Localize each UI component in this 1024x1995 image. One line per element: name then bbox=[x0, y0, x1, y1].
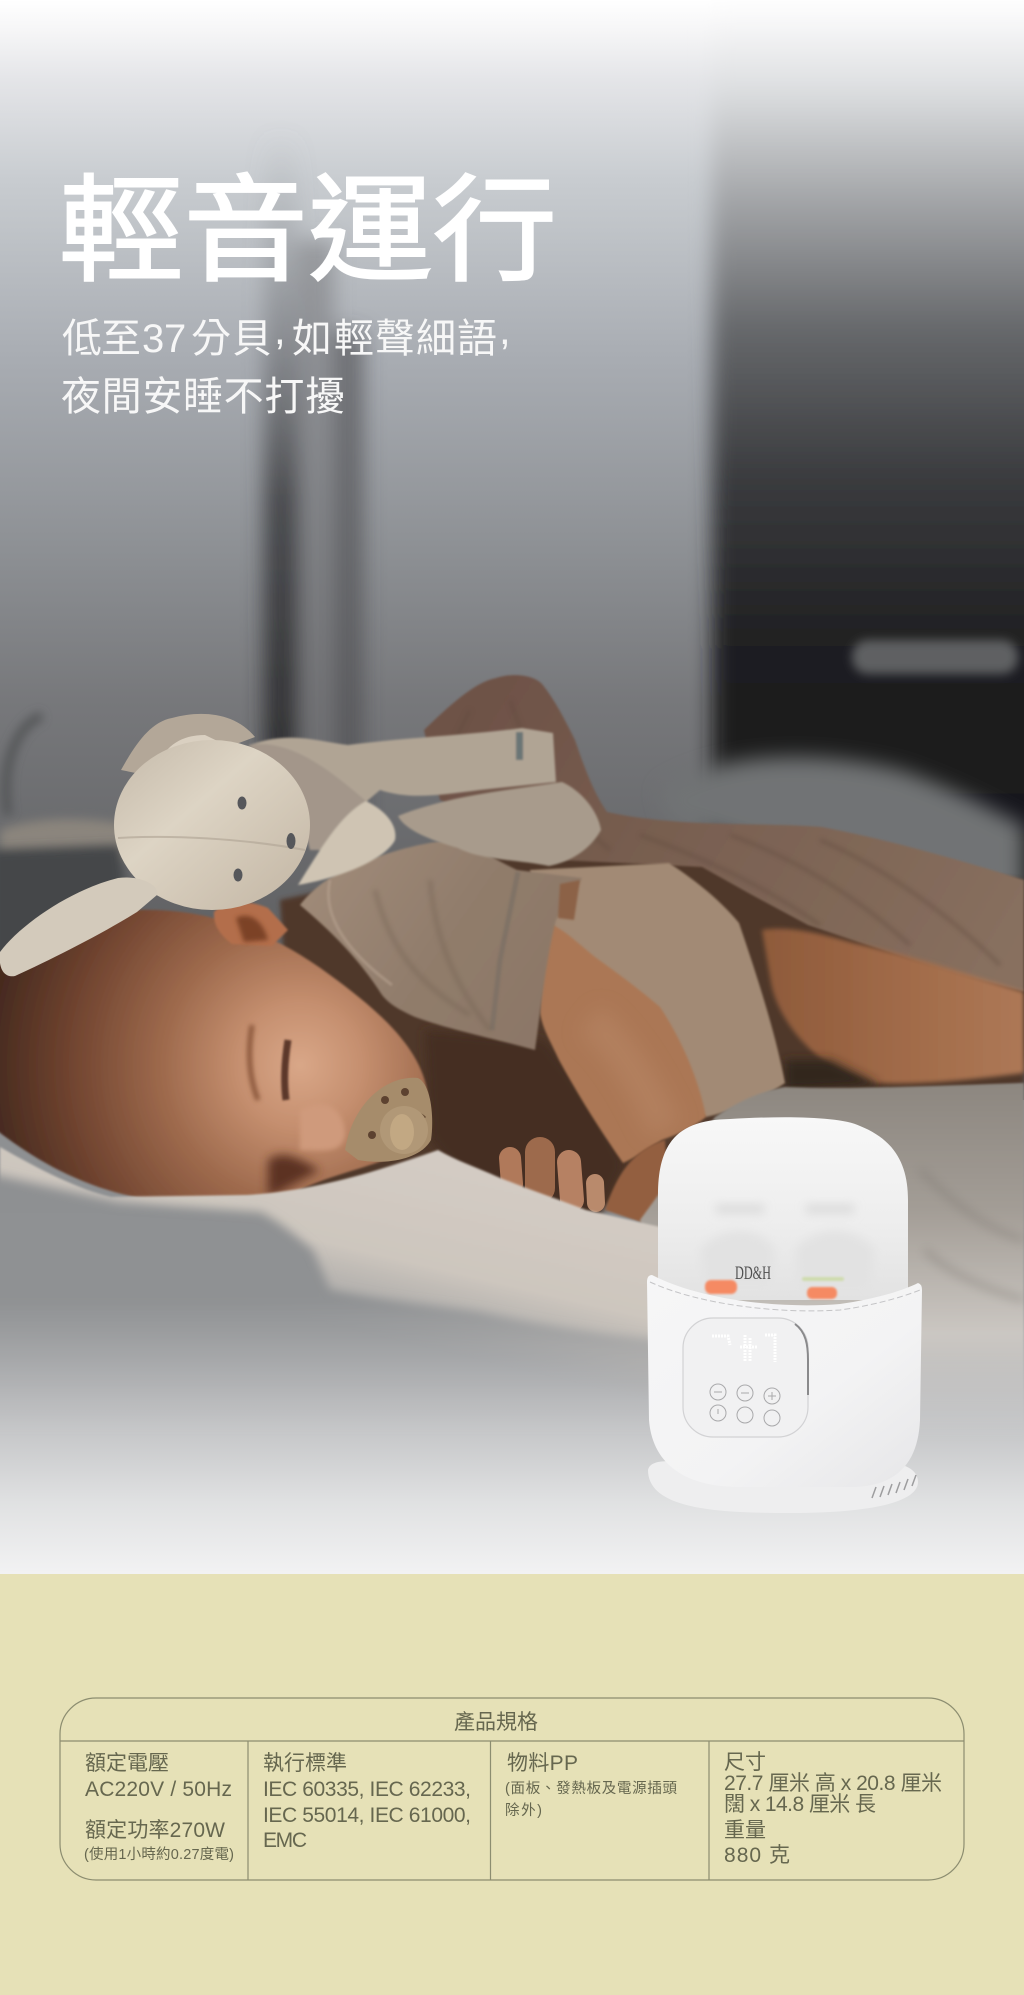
spec column: size and weight: 闊 x 14.8 厘米 長 bbox=[724, 1793, 876, 1816]
spec column: standards: EMC bbox=[263, 1829, 307, 1852]
spec column: standards: 執行標準 bbox=[263, 1752, 347, 1775]
teddy top ear bbox=[121, 714, 255, 778]
spec column: voltage and power: 額定功率270W bbox=[85, 1819, 225, 1842]
eyelid and lashes bbox=[250, 1025, 258, 1100]
title: 輕音運行 bbox=[59, 166, 557, 296]
soft gradient foreground bbox=[0, 1100, 1024, 1574]
shirt sleeve bbox=[300, 840, 582, 1050]
subtitle: 輕 bbox=[334, 317, 374, 361]
temperature display bbox=[712, 1335, 775, 1362]
spec column: standards bbox=[263, 1752, 471, 1852]
spec column: size and weight: 880 克 bbox=[724, 1844, 790, 1867]
spec column: size and weight bbox=[724, 1751, 942, 1867]
subtitle: 語 bbox=[457, 317, 497, 361]
subtitle: 貝 bbox=[232, 317, 272, 361]
pacifier bbox=[345, 1078, 432, 1162]
spec table bbox=[60, 1698, 964, 1880]
base plate bbox=[648, 1461, 918, 1513]
baby arm bbox=[540, 923, 706, 1163]
subtitle: 3 bbox=[142, 317, 164, 361]
baby head bbox=[0, 910, 428, 1200]
subtitle: 低 bbox=[62, 317, 102, 361]
spec column: material: 物料PP bbox=[507, 1752, 578, 1775]
baby ear bbox=[214, 902, 288, 946]
product: double bottle warmer bbox=[647, 1117, 922, 1513]
brand logo: DD&H bbox=[735, 1263, 771, 1284]
dark shadow under arm bbox=[425, 1030, 625, 1215]
baby torso shirt bbox=[530, 863, 785, 1117]
subtitle: 細 bbox=[416, 317, 456, 361]
spec column: size and weight: 尺寸 bbox=[724, 1751, 766, 1774]
nose bbox=[300, 1104, 345, 1151]
under body shadow fill bbox=[280, 830, 1024, 1220]
panel: specifications background bbox=[0, 1574, 1024, 1995]
spec column: standards: IEC 55014, IEC 61000, bbox=[263, 1804, 471, 1827]
spec column: voltage and power: AC220V / 50Hz bbox=[85, 1778, 232, 1801]
spec column: standards: IEC 60335, IEC 62233, bbox=[263, 1778, 471, 1801]
spec column: size and weight: 重量 bbox=[724, 1819, 766, 1842]
photo: sleeping baby scene bbox=[0, 0, 1024, 1574]
blurred light pill on dark wall bbox=[852, 640, 1018, 674]
bed sheet folds right bbox=[920, 1170, 1024, 1300]
subtitle: 至 bbox=[101, 317, 141, 361]
hand bbox=[510, 1140, 670, 1232]
dark curtain band bbox=[264, 130, 364, 830]
brown muslin blanket bbox=[424, 675, 1024, 992]
subtitle: 夜間安睡不打擾 bbox=[61, 375, 345, 419]
warmer sleeve body bbox=[647, 1275, 922, 1487]
control panel bbox=[683, 1318, 808, 1437]
spec column: voltage and power bbox=[84, 1752, 234, 1863]
spec column: material: 除外) bbox=[505, 1802, 542, 1819]
subtitle: 分 bbox=[191, 317, 231, 361]
subtitle: 如 bbox=[292, 317, 332, 361]
right bed sheet bbox=[640, 1083, 1024, 1440]
spec column: size and weight: 27.7 厘米 高 x 20.8 厘米 bbox=[724, 1772, 942, 1795]
teddy limbs bbox=[248, 728, 601, 885]
spec column: material: (面板、發熱板及電源插頭 bbox=[505, 1780, 678, 1797]
blurred hook at left bbox=[6, 716, 42, 815]
baby leg bbox=[762, 929, 1024, 1090]
spec column: material bbox=[505, 1752, 678, 1819]
bed sheet in front bbox=[0, 1147, 700, 1400]
subtitle bbox=[61, 306, 511, 419]
transparent bottle lid bbox=[658, 1117, 908, 1300]
mouth shadow bbox=[268, 1155, 320, 1198]
grey shadow fold over sheet bbox=[0, 1172, 700, 1440]
orange bottle indicators bbox=[705, 1277, 844, 1299]
dark doorway right side bbox=[712, 0, 1024, 1060]
subtitle: , bbox=[274, 306, 286, 353]
blurred pillow behind bbox=[660, 757, 1024, 900]
background wall bbox=[0, 0, 1024, 1130]
spec table frame bbox=[60, 1698, 964, 1880]
teddy bear head bbox=[0, 714, 310, 976]
subtitle: , bbox=[499, 306, 511, 353]
spec heading: 產品規格 bbox=[454, 1711, 538, 1734]
teddy lower ear bbox=[0, 877, 157, 976]
subtitle: 聲 bbox=[375, 317, 415, 361]
spec column: voltage and power: 額定電壓 bbox=[85, 1752, 169, 1775]
spec column: voltage and power: (使用1小時約0.27度電) bbox=[84, 1846, 234, 1863]
subtitle: 7 bbox=[164, 317, 186, 361]
control buttons bbox=[710, 1384, 780, 1426]
bed left edge bbox=[0, 819, 130, 990]
